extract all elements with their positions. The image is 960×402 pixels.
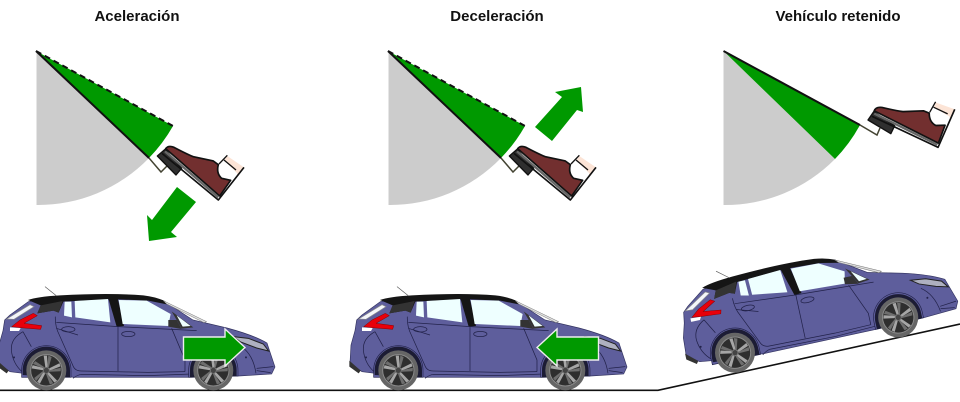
pedal diagram: deceleration [388, 51, 596, 205]
car: accelerating [0, 287, 275, 390]
arrow: car moving forward [184, 329, 245, 366]
ground line and ramp [0, 324, 960, 390]
arrow: car slowing [537, 329, 598, 366]
car: decelerating [349, 287, 627, 390]
arrow: pedal released up [535, 87, 583, 141]
title: Deceleración: Deceleración [450, 8, 544, 25]
title: Vehículo retenido: Vehículo retenido [775, 8, 901, 25]
car: held on slope [669, 223, 960, 383]
title: Aceleración: Aceleración [94, 8, 180, 25]
pedal diagram: vehicle held [724, 51, 960, 205]
arrow: pedal pressed down [147, 187, 196, 241]
pedal diagram: acceleration [36, 51, 244, 205]
